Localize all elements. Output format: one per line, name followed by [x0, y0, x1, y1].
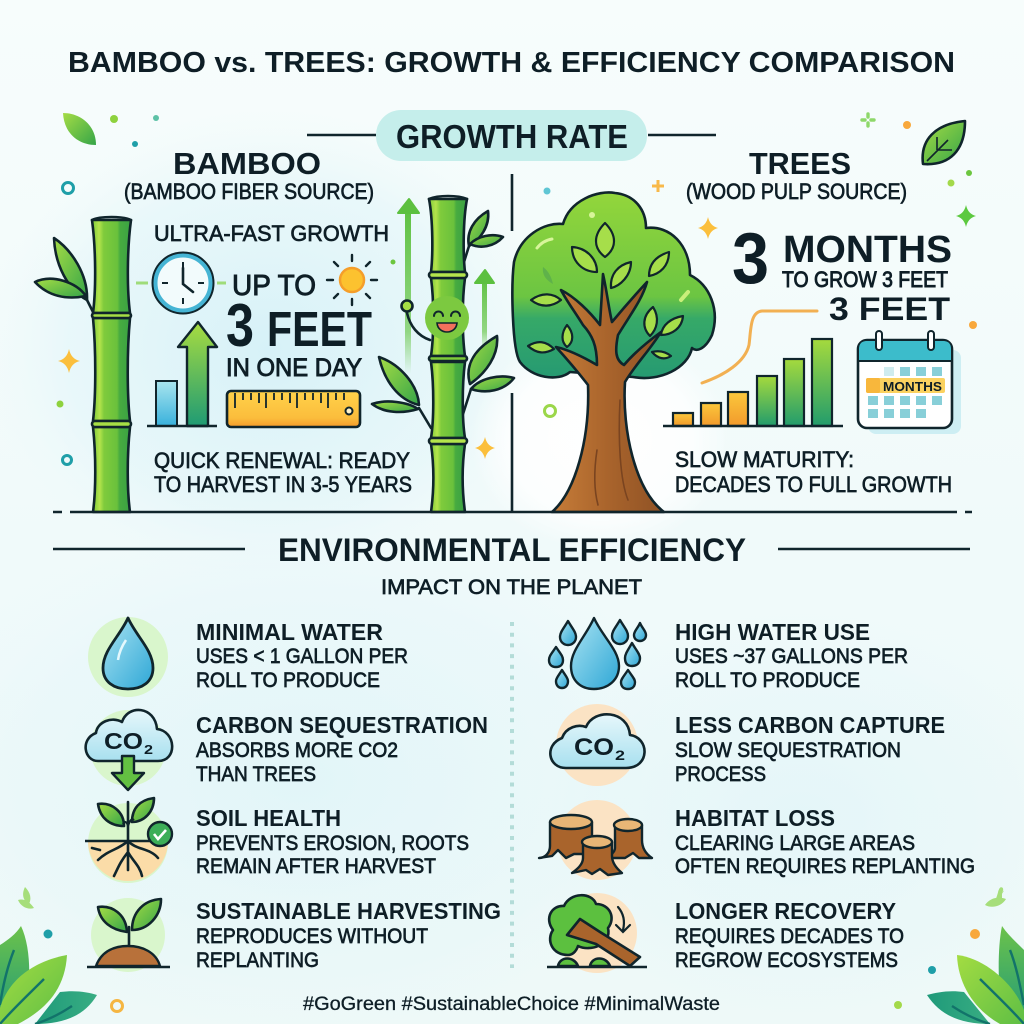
- item: habitat loss: [539, 800, 975, 880]
- decorative leaves: bottom left: [0, 887, 122, 1024]
- text: 3 feet: 3 FEET: [829, 291, 951, 327]
- icon: clock: [136, 252, 226, 314]
- icon: co2 cloud: 2: [615, 747, 625, 763]
- icon: co2 cloud with down arrow: 2: [144, 742, 153, 757]
- icon: co2 cloud with down arrow: [86, 710, 172, 790]
- icon: plant roots with check: [85, 798, 172, 883]
- item: high water use: USES ~37 GALLONS PER: [675, 645, 908, 668]
- heading: bamboo: BAMBOO: [173, 146, 321, 181]
- text: quick renewal: TO HARVEST IN 3-5 YEARS: [154, 472, 412, 497]
- arrows: rising growth: [398, 199, 494, 374]
- heading: environmental efficiency: ENVIRONMENTAL EFFICIENCY: [278, 532, 746, 568]
- dotted divider: [510, 622, 514, 968]
- icon: many water drops: [549, 618, 646, 689]
- text: 3 feet: 3: [226, 292, 254, 359]
- panel: bamboo growth: [35, 146, 514, 512]
- text: slow maturity: [675, 447, 952, 497]
- hashtags: #GoGreen #SustainableChoice #MinimalWaste: [303, 994, 720, 1015]
- icon: ruler: [227, 391, 360, 427]
- item: carbon sequestration: CARBON SEQUESTRATION: [196, 712, 488, 738]
- item: minimal water: USES < 1 GALLON PER: [196, 645, 408, 668]
- big number: 3 months: MONTHS: [783, 229, 952, 271]
- icon: calendar: [858, 331, 961, 434]
- item: sustainable harvesting: REPLANTING: [196, 949, 319, 972]
- item: less carbon capture: LESS CARBON CAPTURE: [675, 712, 945, 738]
- item: sustainable harvesting: [87, 898, 501, 972]
- icon: sun: [327, 255, 377, 305]
- item: minimal water: ROLL TO PRODUCE: [196, 669, 380, 692]
- text: to grow 3 feet: TO GROW 3 FEET: [782, 267, 948, 292]
- icon: fallen tree: [547, 893, 647, 973]
- item: soil health: [85, 798, 469, 883]
- item: high water use: HIGH WATER USE: [675, 619, 870, 645]
- icon: sprout in soil: [87, 898, 170, 972]
- decorative confetti: top right: [862, 114, 977, 329]
- item: habitat loss: OFTEN REQUIRES REPLANTING: [675, 855, 975, 878]
- item: longer recovery: [547, 893, 904, 973]
- item: less carbon capture: SLOW SEQUESTRATION: [675, 739, 901, 762]
- big number: 3 months: 3: [732, 219, 769, 299]
- subheading: impact on the planet: IMPACT ON THE PLANET: [381, 576, 642, 599]
- icon: co2 cloud: [550, 704, 645, 786]
- subheading: bamboo fiber source: (BAMBOO FIBER SOURCE): [124, 179, 374, 204]
- text: slow maturity: SLOW MATURITY:: [675, 447, 854, 472]
- item: less carbon capture: [550, 704, 945, 786]
- heading: growth rate pill: [307, 110, 716, 161]
- item: longer recovery: REGROW ECOSYSTEMS: [675, 949, 898, 972]
- list: tree drawbacks: [539, 618, 975, 973]
- text: quick renewal: QUICK RENEWAL: READY: [154, 448, 410, 473]
- item: carbon sequestration: THAN TREES: [196, 763, 316, 786]
- icon: tree: [512, 192, 715, 512]
- item: minimal water: [88, 617, 408, 697]
- icon: left bamboo stalk: [35, 217, 131, 512]
- icon: smiling bamboo stalk: [372, 196, 514, 512]
- text: in one day: IN ONE DAY: [226, 354, 362, 382]
- item: soil health: REMAIN AFTER HARVEST: [196, 855, 436, 878]
- text: slow maturity: DECADES TO FULL GROWTH: [675, 472, 952, 497]
- list: bamboo benefits: [85, 617, 501, 972]
- item: carbon sequestration: [86, 710, 488, 790]
- item: habitat loss: HABITAT LOSS: [675, 805, 835, 831]
- icon: calendar: MONTHS: [883, 379, 942, 394]
- item: longer recovery: LONGER RECOVERY: [675, 898, 896, 924]
- title: BAMBOO vs. TREES: GROWTH & EFFICIENCY COMPARISON: [68, 47, 955, 79]
- ground line: [53, 511, 972, 513]
- decorative confetti: top left and sides: [56, 113, 718, 464]
- item: soil health: PREVENTS EROSION, ROOTS: [196, 832, 469, 855]
- decorative leaves: bottom right: [894, 889, 1024, 1024]
- item: less carbon capture: PROCESS: [675, 763, 766, 786]
- item: longer recovery: REQUIRES DECADES TO: [675, 925, 904, 948]
- item: high water use: ROLL TO PRODUCE: [675, 669, 860, 692]
- panel: trees growth: [512, 146, 961, 512]
- item: sustainable harvesting: SUSTAINABLE HARVESTING: [196, 898, 501, 924]
- center divider: [511, 174, 513, 512]
- icon: co2 cloud: CO: [574, 734, 614, 761]
- icon: co2 cloud with down arrow: CO: [104, 728, 143, 754]
- item: carbon sequestration: ABSORBS MORE CO2: [196, 739, 398, 762]
- chart: growth arrow and bar: [147, 322, 217, 426]
- text: 3 feet: FEET: [267, 303, 372, 357]
- text: 3 feet: [226, 292, 372, 359]
- heading: trees: TREES: [749, 146, 851, 181]
- item: habitat loss: CLEARING LARGE AREAS: [675, 832, 915, 855]
- subheading: wood pulp source: (WOOD PULP SOURCE): [686, 179, 907, 204]
- chart: slow growth bars: [663, 311, 843, 426]
- heading: growth rate pill: GROWTH RATE: [396, 118, 628, 155]
- text: quick renewal: [154, 448, 412, 497]
- text: up to: UP TO: [232, 270, 316, 302]
- label: ultra-fast growth: ULTRA-FAST GROWTH: [154, 221, 389, 246]
- item: sustainable harvesting: REPRODUCES WITHOUT: [196, 925, 428, 948]
- item: minimal water: MINIMAL WATER: [196, 619, 383, 645]
- icon: water drop: [88, 617, 168, 697]
- item: high water use: [549, 618, 908, 692]
- big number: 3 months: [732, 219, 952, 299]
- icon: tree stumps: [539, 800, 652, 880]
- item: soil health: SOIL HEALTH: [196, 805, 341, 831]
